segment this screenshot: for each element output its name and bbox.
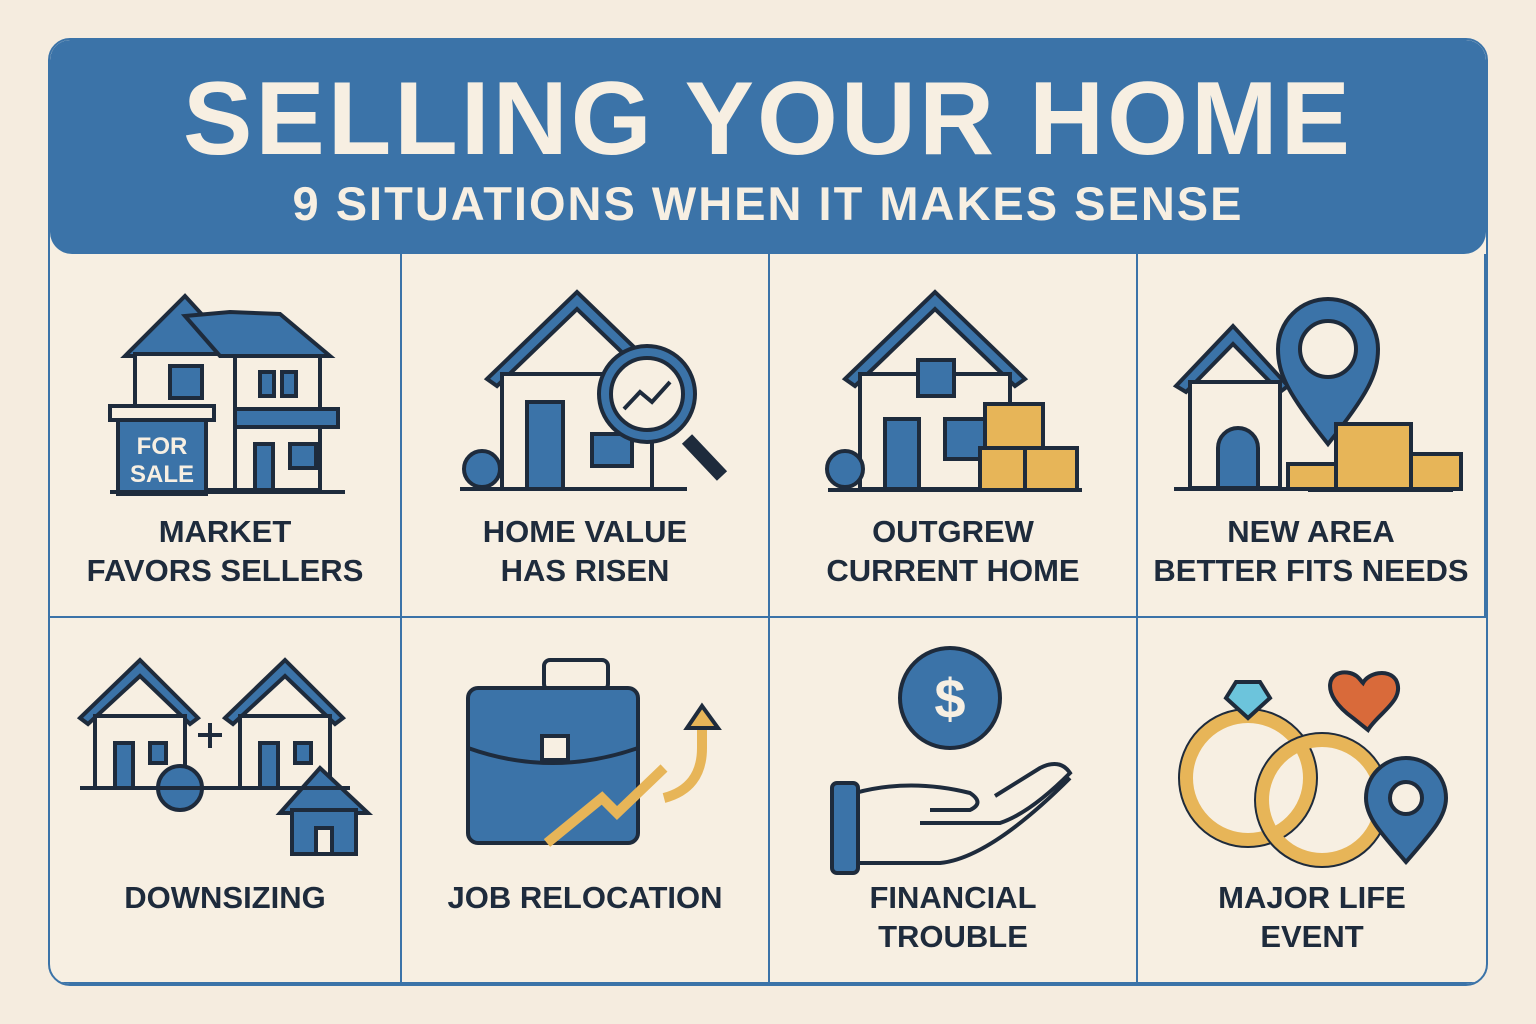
icon: house with magnifier <box>460 289 727 491</box>
label: HAS RISEN <box>501 553 669 588</box>
label: MAJOR LIFE <box>1218 880 1406 915</box>
label: CURRENT HOME <box>826 553 1080 588</box>
label: OUTGREW <box>872 514 1034 549</box>
icon: rings, heart, pin <box>1178 670 1448 868</box>
label: NEW AREA <box>1227 514 1395 549</box>
icon: hand with coin <box>830 646 1072 875</box>
label: HOME VALUE <box>483 514 687 549</box>
icon: house for sale: SALE <box>130 461 194 488</box>
panel: major life event <box>1138 618 1486 984</box>
label <box>826 514 1080 588</box>
label: TROUBLE <box>878 919 1028 954</box>
label: FINANCIAL <box>869 880 1037 915</box>
label: DOWNSIZING <box>124 880 326 915</box>
label: EVENT <box>1260 919 1364 954</box>
label: FAVORS SELLERS <box>87 553 363 588</box>
icon: house with boxes <box>825 289 1082 492</box>
panel: financial trouble <box>770 618 1138 984</box>
title: SELLING YOUR HOME <box>183 61 1353 177</box>
icon: briefcase with arrow <box>466 658 722 847</box>
icon: two houses <box>77 657 373 856</box>
label <box>483 514 687 588</box>
label: BETTER FITS NEEDS <box>1153 553 1469 588</box>
label: JOB RELOCATION <box>448 880 722 915</box>
panel: job relocation <box>402 618 770 984</box>
panel: market favors sellers <box>50 254 402 618</box>
label <box>1153 514 1469 588</box>
icon: house with pin and boxes <box>1172 297 1463 492</box>
panel: outgrew home <box>770 254 1138 618</box>
panel: downsizing <box>50 618 402 984</box>
panel: new area <box>1138 254 1486 618</box>
label <box>87 514 363 588</box>
header banner <box>50 40 1486 254</box>
icon: house for sale <box>108 293 345 496</box>
panel: home value risen <box>402 254 770 618</box>
icon: house for sale: FOR <box>137 433 187 460</box>
icon: hand with coin: $ <box>934 667 966 730</box>
label: MARKET <box>159 514 291 549</box>
label <box>1218 880 1406 954</box>
subtitle: 9 SITUATIONS WHEN IT MAKES SENSE <box>292 177 1244 230</box>
label <box>869 880 1037 954</box>
